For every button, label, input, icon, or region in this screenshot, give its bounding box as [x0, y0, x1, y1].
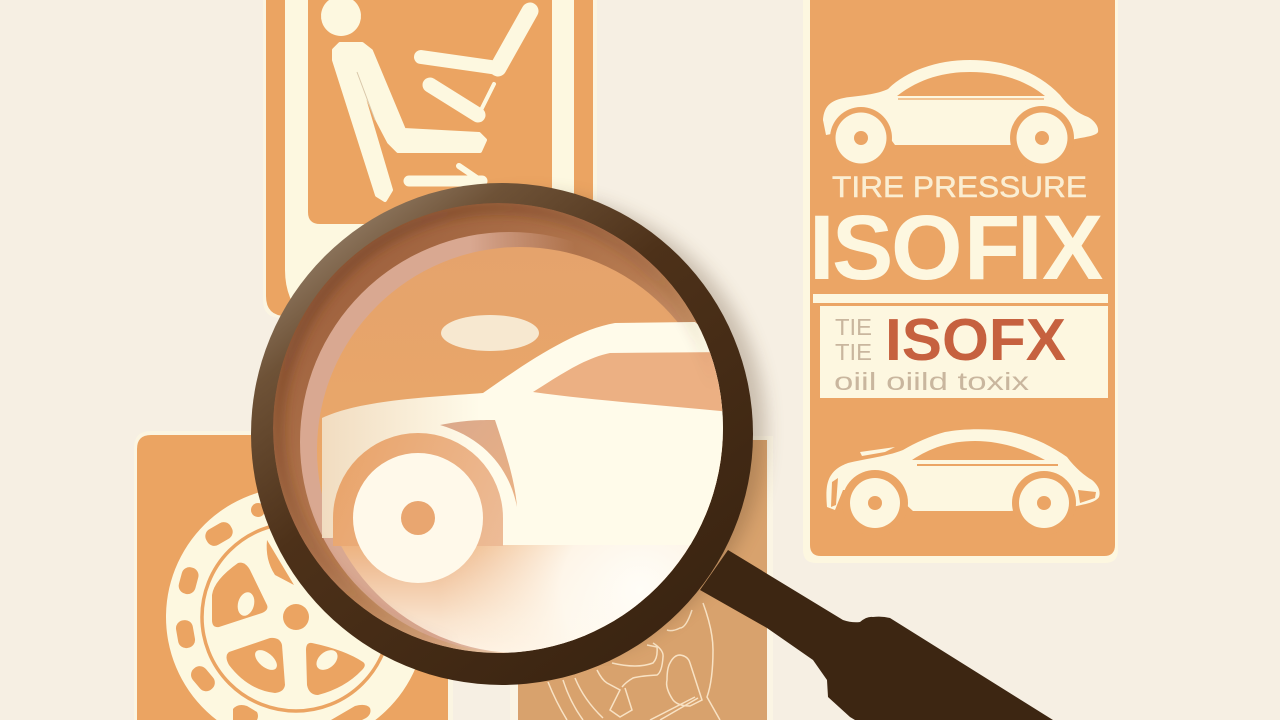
small caption: oiil oiild toxix: [834, 368, 1030, 396]
inner lens shading: [278, 208, 718, 648]
label text: ISOFX: ISOFX: [885, 307, 1066, 373]
icon: seated person and seat: [321, 0, 530, 200]
icon: top car: [823, 60, 1098, 170]
magnifying glass: [251, 183, 1053, 720]
panel: ISOFIX label card: [803, 0, 1118, 563]
icon: bottom car: [826, 429, 1100, 536]
handle: [700, 550, 1053, 720]
label box: ISOFX: [820, 306, 1108, 398]
panel: child seat icon card: [263, 0, 597, 320]
icon: line drawing of seat detail: [548, 603, 720, 720]
divider bar: [813, 294, 1108, 303]
heading: TIRE PRESSURE: TIRE PRESSURE: [832, 171, 1087, 204]
small label: TIE bottom: TIE: [835, 339, 872, 365]
panel: seat diagram card: [510, 436, 773, 720]
rim ring: [251, 183, 753, 685]
icon: wheel: [166, 487, 426, 720]
infographic canvas: [137, 0, 1115, 720]
small label: TIE top: TIE: [835, 314, 872, 340]
panel: wheel icon card: [134, 431, 453, 720]
magnified car: [322, 315, 730, 583]
magnifier shadow: [294, 194, 766, 666]
heading: ISOFIX: ISOFIX: [809, 197, 1103, 299]
lens: [273, 203, 723, 653]
